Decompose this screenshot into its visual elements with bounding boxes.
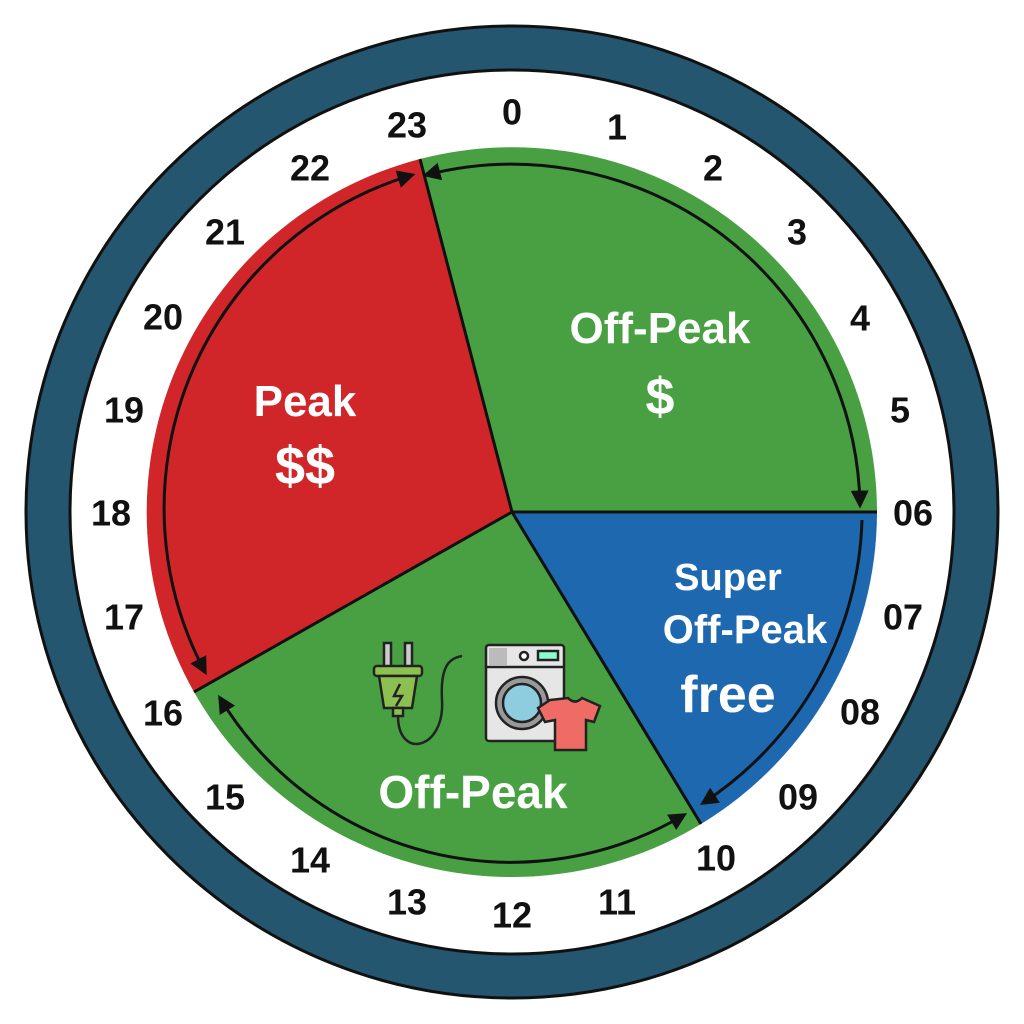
hour numbers: 14	[290, 840, 330, 880]
label: super off-peak free: Super	[674, 557, 782, 599]
hour numbers: 18	[91, 492, 131, 534]
label: off-peak night: $	[646, 368, 675, 426]
hour numbers: 15	[205, 776, 245, 818]
hour numbers: 09	[778, 776, 818, 818]
hour numbers: 19	[104, 390, 144, 430]
label: peak	[254, 377, 357, 496]
hour numbers: 11	[598, 882, 636, 922]
hour numbers: 16	[143, 692, 183, 734]
hour numbers: 06	[893, 492, 933, 534]
label: super off-peak free	[663, 557, 828, 724]
hour numbers: 23	[387, 104, 427, 146]
hour numbers: 07	[883, 596, 923, 638]
label: peak: Peak	[254, 377, 357, 426]
pie: super off-peak sector	[512, 512, 877, 824]
icon: plug	[374, 643, 462, 744]
label: peak: $$	[275, 436, 335, 496]
label: super off-peak free: Off-Peak	[663, 608, 828, 652]
hour numbers: 0	[502, 92, 522, 132]
hour numbers: 12	[492, 894, 532, 936]
icon: washing machine	[486, 645, 564, 741]
arrow: off-peak afternoon range	[220, 698, 684, 862]
label: off-peak afternoon: Off-Peak	[378, 766, 568, 818]
hour numbers: 4	[850, 298, 870, 338]
hour numbers: 22	[290, 148, 330, 188]
label: off-peak night: Off-Peak	[570, 304, 751, 353]
hour numbers: 5	[890, 390, 910, 430]
pie: off-peak afternoon sector	[194, 512, 701, 877]
hour numbers: 21	[205, 212, 245, 252]
hour numbers: 1	[607, 106, 627, 148]
hour numbers: 17	[104, 596, 144, 638]
label: super off-peak free: free	[680, 666, 776, 724]
icon: t-shirt	[538, 698, 600, 750]
hour numbers: 13	[387, 882, 427, 922]
hour numbers: 08	[840, 692, 880, 732]
label: off-peak night	[570, 304, 751, 426]
hour numbers: 10	[696, 838, 736, 878]
arrow: off-peak night range	[426, 164, 860, 505]
arrow: super off-peak range	[703, 520, 862, 803]
pie: off-peak night sector	[420, 147, 877, 512]
hour numbers: 3	[787, 212, 807, 252]
hour numbers	[91, 92, 933, 936]
arrow: peak range	[164, 175, 412, 672]
hour numbers: 20	[143, 296, 183, 338]
pie: peak sector	[147, 159, 512, 692]
hour numbers: 2	[703, 148, 723, 188]
